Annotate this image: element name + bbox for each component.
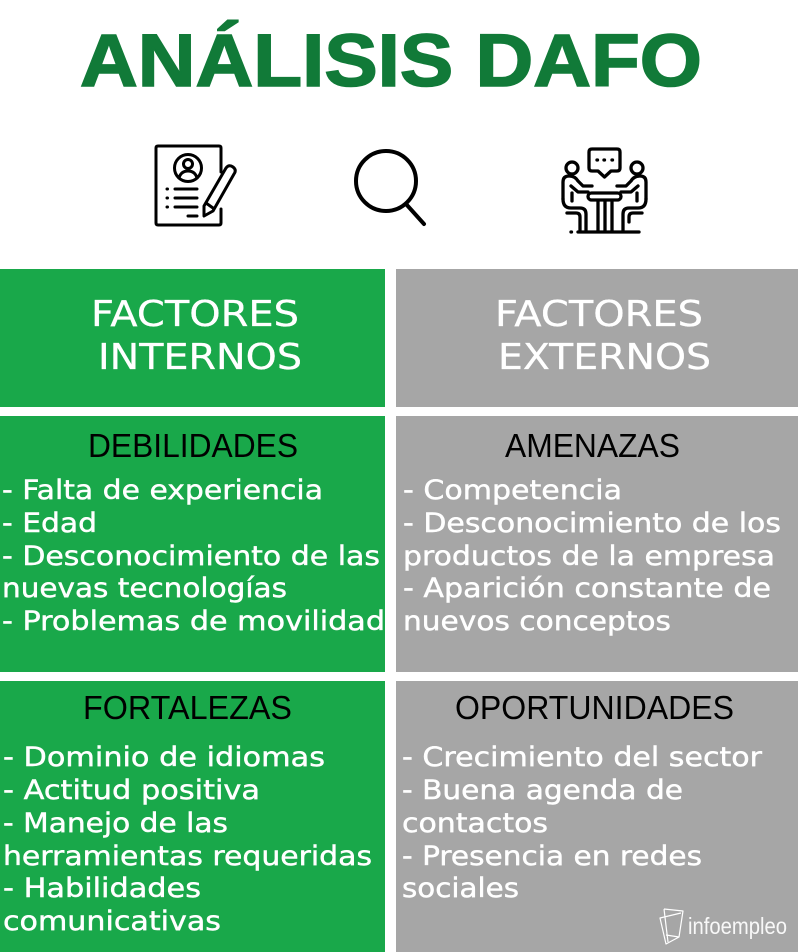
panel: amenazas: - Aparición constante de	[403, 573, 771, 604]
panel: factores externos: EXTERNOS	[498, 337, 711, 378]
icon: magnifying glass	[356, 151, 424, 224]
panel: fortalezas: - Habilidades	[3, 873, 201, 904]
icon: document with pencil	[156, 146, 235, 225]
panel: factores internos	[0, 269, 385, 407]
panel: debilidades: nuevas tecnologías	[2, 573, 287, 604]
panel: debilidades: - Problemas de movilidad	[2, 606, 385, 637]
panel: debilidades	[0, 416, 385, 672]
panel: oportunidades: sociales	[402, 873, 519, 904]
panel: factores internos: INTERNOS	[98, 337, 302, 378]
panel: debilidades: - Edad	[2, 508, 97, 539]
panel: oportunidades: - Buena agenda de	[402, 775, 683, 806]
icon: two people meeting at a table	[563, 149, 646, 232]
logo: infoempleo	[660, 909, 787, 944]
panel: oportunidades: OPORTUNIDADES	[455, 690, 734, 727]
panel: amenazas: - Desconocimiento de los	[403, 508, 781, 539]
panel: fortalezas: - Manejo de las	[3, 808, 228, 839]
panel: oportunidades	[396, 681, 798, 952]
panel: debilidades: - Falta de experiencia	[2, 475, 323, 506]
panel: amenazas: nuevos conceptos	[403, 606, 671, 637]
panel: fortalezas: FORTALEZAS	[83, 690, 292, 727]
panel: debilidades: - Desconocimiento de las	[2, 541, 380, 572]
panel: amenazas: productos de la empresa	[403, 541, 775, 572]
title: ANÁLISIS DAFO	[80, 19, 702, 102]
panel: debilidades: DEBILIDADES	[88, 428, 298, 465]
panel: fortalezas: comunicativas	[3, 906, 221, 937]
panel: oportunidades: - Presencia en redes	[402, 841, 702, 872]
logo: infoempleo: infoempleo	[688, 913, 787, 939]
panel: amenazas: AMENAZAS	[505, 428, 680, 465]
panel: oportunidades: contactos	[402, 808, 548, 839]
panel: factores externos	[396, 269, 798, 407]
panel: amenazas: - Competencia	[403, 475, 622, 506]
panel: fortalezas: - Actitud positiva	[3, 775, 260, 806]
panel: factores externos: FACTORES	[495, 294, 703, 335]
panel: factores internos: FACTORES	[91, 294, 299, 335]
panel: amenazas	[396, 416, 798, 672]
panel: fortalezas: herramientas requeridas	[3, 841, 372, 872]
panel: fortalezas	[0, 681, 385, 952]
panel: fortalezas: - Dominio de idiomas	[3, 742, 325, 773]
panel: oportunidades: - Crecimiento del sector	[402, 742, 763, 773]
